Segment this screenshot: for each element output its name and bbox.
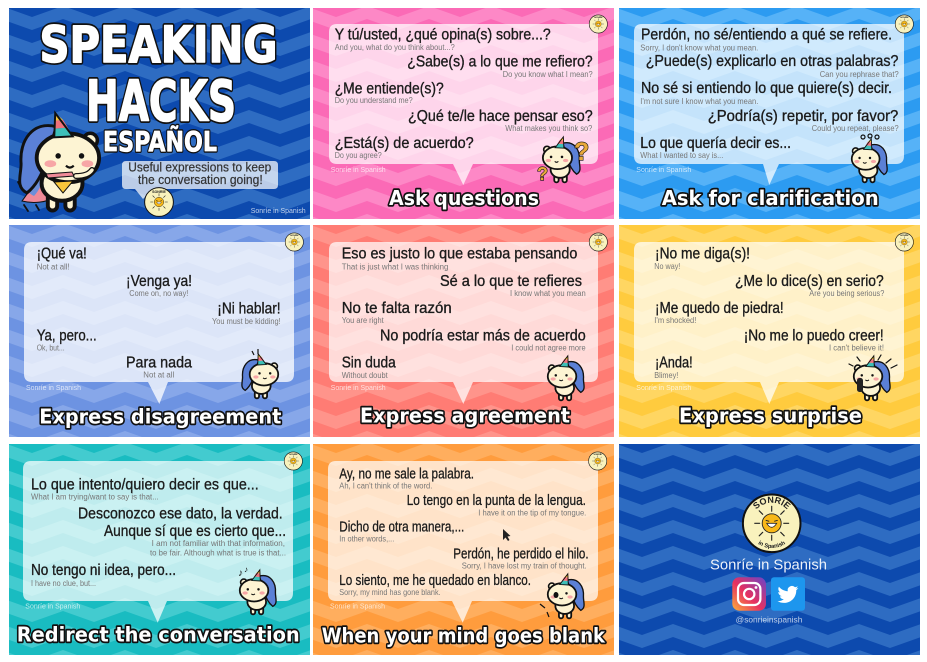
phrases: ¡Venga ya! — [126, 273, 192, 290]
panel: redirect the conversation — [9, 444, 310, 655]
credit: Sonríe in Spanish — [331, 165, 386, 174]
panel: ask questions — [313, 8, 614, 219]
background: orange chevrons — [313, 444, 614, 655]
phrases: Do you know what I mean? — [503, 70, 593, 79]
credit: Sonríe in Spanish — [636, 165, 691, 174]
phrases: Could you repeat, please? — [812, 124, 899, 133]
icon: Sonríe logo — [589, 233, 607, 251]
background: teal chevrons — [9, 444, 310, 655]
phrases: Dicho de otra manera,... — [339, 520, 464, 536]
icon: annoyed unicorn — [242, 349, 278, 398]
speech bubble — [634, 242, 904, 404]
icon: Sonríe logo: SONRÍE — [900, 234, 909, 237]
panel: express surprise — [619, 225, 920, 437]
icon: whistling unicorn with music notes: ♪ — [244, 565, 248, 574]
icon: Sonríe logo — [285, 233, 303, 251]
icon: happy unicorn — [548, 356, 584, 400]
credit: Sonríe in Spanish — [636, 383, 691, 392]
icon: Sonríe logo: SONRÍE — [594, 16, 603, 19]
phrases: Do you agree? — [335, 151, 382, 160]
phrases: ¡Me quedo de piedra! — [655, 300, 784, 317]
background: blue chevrons — [619, 444, 920, 655]
phrases: Do you understand me? — [335, 96, 413, 105]
phrases: Lo tengo en la punta de la lengua. — [407, 493, 586, 509]
icon: Sonríe logo — [589, 15, 607, 33]
phrases: Eso es justo lo que estaba pensando — [342, 246, 577, 263]
credit: Sonríe in Spanish — [25, 601, 80, 610]
phrases: I'm not sure I know what you mean. — [640, 97, 758, 106]
background: periwinkle chevrons — [9, 225, 310, 437]
phrases: Not at all! — [37, 262, 70, 271]
phrases: Ay, no me sale la palabra. — [339, 466, 474, 482]
icon: crying unicorn — [540, 574, 584, 618]
callout: useful expressions speech bubble — [122, 161, 278, 199]
phrases: Ah, I can't think of the word. — [339, 481, 432, 490]
heading: Speaking Hacks Español — [40, 16, 278, 158]
phrases: to be fair. Although what is true is that... — [150, 549, 286, 558]
icon: Sonríe in Spanish logo — [742, 494, 802, 554]
phrases: I could not agree more — [511, 344, 586, 353]
heading: Redirect the conversation — [17, 623, 300, 647]
callout: useful expressions speech bubble: the conversation going! — [138, 173, 263, 187]
speech bubble — [634, 24, 904, 185]
phrases: No tengo ni idea, pero... — [31, 562, 176, 579]
phrases: Can you rephrase that? — [820, 70, 899, 79]
phrases: I'm shocked! — [654, 316, 696, 325]
phrases: Sorry, my mind has gone blank. — [339, 588, 441, 597]
speech bubble — [23, 461, 293, 623]
heading: Express agreement — [360, 404, 570, 428]
icon: Sonríe logo — [284, 452, 302, 470]
background: blue chevrons — [619, 8, 920, 219]
phrases: What I am trying/want to say is that... — [31, 492, 159, 501]
phrases — [37, 245, 281, 380]
phrases: No way! — [654, 262, 680, 271]
speech bubble — [329, 24, 598, 185]
icon: confused unicorn — [852, 134, 887, 182]
phrases: No te falta razón — [342, 300, 452, 317]
icon: Sonríe in Spanish logo: SONRÍE — [753, 496, 791, 510]
phrases: Y tú/usted, ¿qué opina(s) sobre...? — [335, 26, 551, 44]
phrases: What makes you think so? — [505, 124, 593, 133]
credit: Sonríe in Spanish — [251, 206, 306, 215]
icon: Sonríe logo: SONRÍE — [900, 16, 909, 19]
brand name: Sonríe in Spanish — [710, 556, 827, 573]
icon: Sonríe logo — [895, 15, 913, 33]
phrases: What I wanted to say is... — [640, 151, 723, 160]
heading: Speaking Hacks Español: ESPAÑOL — [103, 124, 217, 158]
icon: Sonríe logo: SONRÍE — [289, 453, 298, 456]
phrases: Perdón, no sé/entiendo a qué se refiere. — [641, 26, 892, 44]
phrases: Sorry, I don't know what you mean. — [640, 44, 758, 52]
panel: when your mind goes blank — [313, 444, 614, 655]
phrases: You are right — [342, 316, 384, 325]
phrases: ¿Puede(s) explicarlo en otras palabras? — [646, 53, 898, 70]
icon: mouse cursor — [503, 529, 510, 541]
phrases: Sin duda — [342, 355, 396, 372]
credit: Sonríe in Spanish — [331, 383, 386, 392]
icon: Sonríe logo: SONRÍE — [152, 189, 166, 194]
credit: Sonríe in Spanish — [26, 383, 81, 392]
heading: Express surprise — [679, 404, 862, 428]
phrases: Not at all — [143, 371, 175, 380]
icon: Sonríe logo — [895, 233, 913, 251]
phrases: In other words,... — [339, 535, 394, 544]
phrases — [31, 476, 286, 588]
phrases: Lo siento, me he quedado en blanco. — [339, 573, 531, 589]
credit: Sonríe in Spanish — [330, 601, 385, 610]
social handle: @sonrieinspanish — [736, 615, 802, 624]
phrases: I can't believe it! — [829, 344, 884, 353]
phrases: Blimey! — [654, 371, 678, 380]
phrases — [339, 466, 589, 597]
icon: Sonríe logo — [145, 188, 173, 216]
phrases: ¡Anda! — [655, 355, 693, 372]
phrases: I know what you mean — [510, 289, 586, 298]
callout: useful expressions speech bubble: Useful expressions to keep — [128, 161, 271, 175]
heading: Ask questions — [389, 186, 539, 210]
phrases: Ya, pero... — [37, 328, 97, 345]
background: coral chevrons — [313, 225, 614, 437]
phrases: Desconozco ese dato, la verdad. — [78, 506, 283, 523]
phrases — [342, 246, 586, 380]
heading: Speaking Hacks Español: ESPAÑOL — [103, 124, 217, 158]
icon: Twitter — [771, 577, 805, 611]
icon: Sonríe logo: SONRÍE — [594, 453, 602, 456]
heading: Speaking Hacks Español: SPEAKING — [40, 16, 278, 74]
phrases: ¿Qué te/le hace pensar eso? — [408, 108, 593, 125]
panel: ask for clarification — [619, 8, 920, 219]
icon: questioning unicorn: ? — [574, 138, 589, 166]
icon: whistling unicorn with music notes — [238, 565, 276, 614]
phrases: ¡No me diga(s)! — [655, 246, 750, 263]
heading: Express disagreement — [39, 404, 281, 428]
heading: Ask for clarification — [662, 186, 879, 210]
icon: questioning unicorn: ? — [537, 164, 548, 184]
icon: Sonríe logo: SONRÍE — [290, 234, 299, 237]
background: pink chevrons — [313, 8, 614, 219]
phrases — [640, 26, 899, 160]
icon: Sonríe logo: SONRÍE — [594, 234, 603, 237]
phrases: I am not familiar with that information, — [152, 539, 285, 548]
phrases: Perdón, he perdido el hilo. — [453, 546, 589, 562]
background: blue chevrons — [9, 8, 310, 219]
phrases: Without doubt — [342, 371, 388, 380]
speech bubble — [329, 242, 598, 404]
phrases: I have no clue, but... — [31, 579, 96, 588]
phrases: Come on, no way! — [129, 289, 188, 298]
speech bubble — [328, 461, 598, 623]
phrases: Aunque sí que es cierto que... — [104, 523, 286, 540]
phrases — [335, 26, 593, 160]
phrases: No sé si entiendo lo que quiere(s) decir. — [641, 80, 892, 97]
panel: title card — [9, 8, 310, 219]
phrases: Sorry, I have lost my train of thought. — [462, 561, 587, 570]
icon: Instagram — [732, 577, 766, 611]
phrases: Are you being serious? — [809, 289, 885, 298]
icon: Sonríe in Spanish logo: in Spanish — [758, 540, 786, 549]
phrases: ¡No me lo puedo creer! — [744, 328, 884, 345]
panel: express agreement — [313, 225, 614, 437]
speech bubble — [24, 242, 294, 404]
phrases: ¿Sabe(s) a lo que me refiero? — [407, 54, 593, 70]
phrases: And you, what do you think about...? — [335, 43, 455, 52]
icon: shocked unicorn with microphone — [849, 355, 897, 400]
phrases: ¿Me lo dice(s) en serio? — [735, 273, 884, 290]
icon: Sonríe logo — [589, 452, 607, 470]
icon: questioning unicorn — [537, 137, 589, 184]
phrases: I have it on the tip of my tongue. — [478, 508, 586, 517]
heading: When your mind goes blank — [322, 624, 606, 648]
phrases: Lo que intento/quiero decir es que... — [31, 476, 259, 493]
phrases: Ok, but... — [37, 344, 65, 353]
background: yellow chevrons — [619, 225, 920, 437]
heading: Speaking Hacks Español: HACKS — [86, 70, 236, 134]
phrases: Sé a lo que te refieres — [440, 273, 582, 290]
phrases: ¡Qué va! — [37, 245, 87, 262]
phrases: You must be kidding! — [212, 317, 281, 326]
heading: Speaking Hacks Español: SPEAKING — [40, 16, 278, 74]
icon: superhero unicorn — [18, 113, 99, 211]
panel: social media card — [619, 444, 920, 655]
phrases: ¡Ni hablar! — [217, 300, 281, 317]
phrases — [654, 246, 885, 380]
phrases: Para nada — [126, 354, 192, 371]
phrases: That is just what I was thinking — [342, 262, 448, 272]
phrases: ¿Podría(s) repetir, por favor? — [708, 108, 898, 125]
phrases: ¿Me entiende(s)? — [335, 80, 444, 97]
icon: whistling unicorn with music notes: ♪ — [238, 568, 243, 579]
panel: express disagreement — [9, 225, 310, 437]
phrases: Lo que quería decir es... — [640, 135, 791, 152]
phrases: No podría estar más de acuerdo — [380, 328, 586, 345]
heading: Speaking Hacks Español: HACKS — [86, 70, 236, 134]
phrases: ¿Está(s) de acuerdo? — [335, 135, 474, 152]
